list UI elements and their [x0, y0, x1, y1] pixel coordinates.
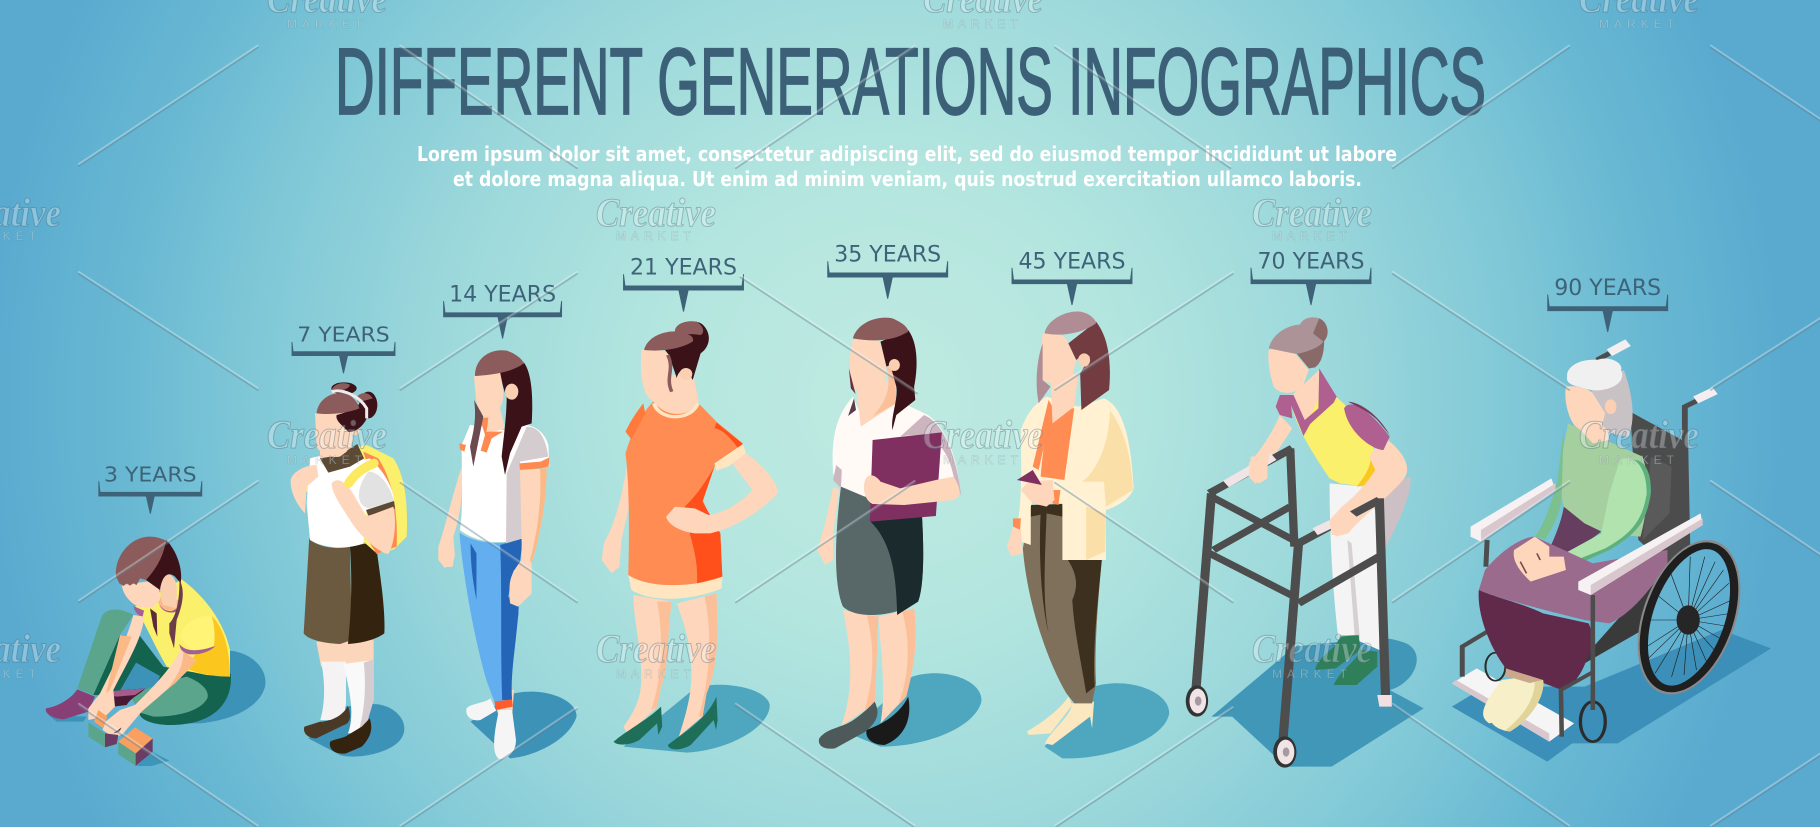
age label: 7 years: 7 YEARS: [297, 323, 390, 347]
walker front rails: [1195, 448, 1386, 753]
figure: 45 year old with jacket: [1007, 311, 1169, 758]
walker wheels: [1186, 685, 1296, 768]
age label: 45 years: [1012, 248, 1132, 305]
watermarks: Creative: [923, 412, 1043, 457]
age label: 3 years: 3 YEARS: [104, 463, 197, 487]
walker rear rails: [1209, 448, 1296, 597]
figure: 35 year old with folder: [817, 318, 981, 749]
wheel spokes: [1647, 557, 1732, 677]
small wheels: [1485, 653, 1605, 742]
watermarks: MARKET: [943, 453, 1023, 467]
age label: 14 years: [444, 282, 562, 338]
age label: 70 years: 70 YEARS: [1258, 248, 1364, 274]
intro text: et dolore magna aliqua. Ut enim ad minim veniam, quis nostrud exercitation ullamco laboris.: [453, 167, 1362, 191]
intro text: Lorem ipsum dolor sit amet, consectetur adipiscing elit, sed do eiusmod tempor incididunt ut labore: [417, 142, 1397, 166]
watermarks: MARKET: [1599, 17, 1679, 31]
watermarks: MARKET: [1272, 667, 1352, 681]
watermarks: MARKET: [616, 667, 696, 681]
age label: 21 years: 21 YEARS: [630, 255, 737, 281]
figure: 14 year old upper body: [438, 350, 549, 590]
figure: 7 year old lower body: [304, 538, 404, 757]
age label: 70 years: [1251, 248, 1371, 305]
watermarks: MARKET: [287, 453, 367, 467]
age label: 45 years: 45 YEARS: [1018, 248, 1126, 274]
figure: 3 year old sitting with blocks: [46, 537, 265, 766]
watermarks: MARKET: [1272, 229, 1352, 243]
watermarks: Creative: [267, 412, 387, 457]
age label: 35 years: 35 YEARS: [834, 242, 941, 268]
figure: 21 year old in orange dress: [602, 321, 778, 753]
age label: 3 years: [99, 463, 202, 514]
figure: 90 year old in wheelchair: [1452, 343, 1771, 762]
watermarks: Creative: [596, 626, 716, 671]
watermarks: Creative: [1252, 190, 1372, 235]
watermarks: Creative: [1252, 626, 1372, 671]
figure: 14 year old lower body: [438, 533, 577, 759]
watermarks: MARKET: [616, 229, 696, 243]
age label: 90 years: 90 YEARS: [1554, 275, 1661, 301]
age label: 7 years: [292, 323, 395, 373]
watermarks: [0, 0, 1699, 681]
watermarks: MARKET: [943, 17, 1023, 31]
watermarks: MARKET: [1599, 453, 1679, 467]
figure: 70 year old with walking frame: [1186, 317, 1424, 768]
figure: 7 year old upper body: [291, 382, 407, 554]
age label: 90 years: [1548, 275, 1668, 332]
large wheel: [1622, 534, 1756, 701]
age label: 35 years: [828, 242, 948, 299]
age label: 14 years: 14 YEARS: [449, 282, 556, 308]
intro text: [417, 142, 1397, 191]
walker grips: [1226, 457, 1332, 532]
watermarks: Creative: [1579, 412, 1699, 457]
watermarks: MARKET: [287, 17, 367, 31]
age label: 21 years: [624, 255, 744, 312]
watermarks: Creative: [596, 190, 716, 235]
